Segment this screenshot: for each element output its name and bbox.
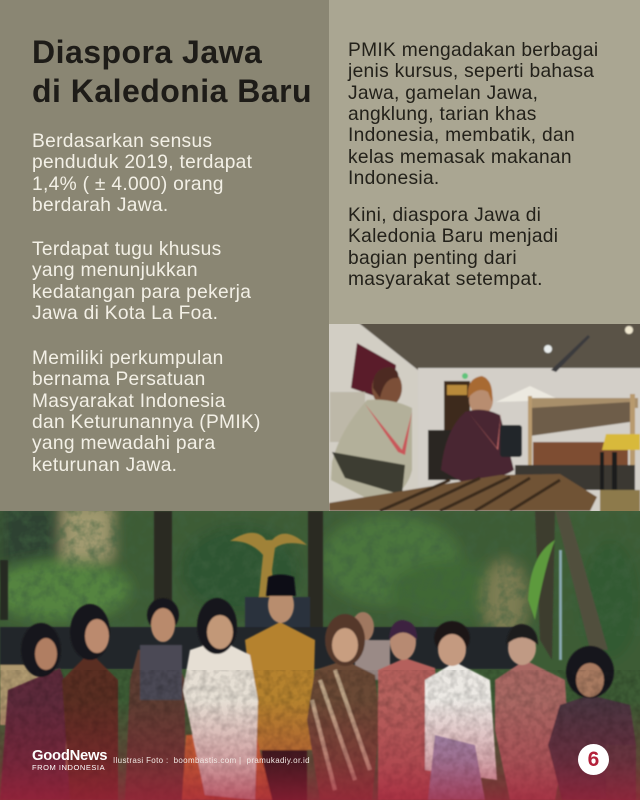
person 3 xyxy=(125,598,185,800)
text block: courses: kelas memasak makanan xyxy=(348,147,572,168)
text block: courses: angklung, tarian khas xyxy=(348,104,537,125)
text block: monument: yang menunjukkan xyxy=(32,260,198,281)
text block: today: Kaledonia Baru menjadi xyxy=(348,226,558,247)
text block: courses: Jawa, gamelan Jawa, xyxy=(348,83,538,104)
text block: today: masyarakat setempat. xyxy=(348,269,543,290)
panel: left text xyxy=(0,0,329,511)
text block: courses: PMIK mengadakan berbagai xyxy=(348,40,598,61)
text block: census: penduduk 2019, terdapat xyxy=(32,152,252,173)
background: foliage xyxy=(0,500,640,800)
title: di Kaledonia Baru xyxy=(32,73,312,109)
text block: PMIK association xyxy=(32,348,261,476)
text block: courses xyxy=(348,40,598,189)
text block: courses: Indonesia, membatik, dan xyxy=(348,125,575,146)
text block: courses: Indonesia. xyxy=(348,168,440,189)
text block: PMIK association: bernama Persatuan xyxy=(32,369,206,390)
text block: census: 1,4% ( ± 4.000) orang xyxy=(32,174,224,195)
text block: PMIK association: Memiliki perkumpulan xyxy=(32,348,224,369)
person 8 xyxy=(378,620,440,800)
text block: monument: Jawa di Kota La Foa. xyxy=(32,303,218,324)
person 5 man xyxy=(245,574,315,800)
logo tagline: FROM INDONESIA xyxy=(32,763,105,772)
text block: census: Berdasarkan sensus xyxy=(32,131,212,152)
panel: right text xyxy=(329,0,640,324)
foliage texture xyxy=(0,511,640,636)
text block: PMIK association: yang mewadahi para xyxy=(32,433,216,454)
logo wordmark: GoodNews xyxy=(32,748,107,764)
person 4 xyxy=(182,598,272,800)
text block: monument xyxy=(32,239,251,324)
text block: PMIK association: Masyarakat Indonesia xyxy=(32,391,226,412)
photo: group portrait xyxy=(0,511,640,800)
person 6 xyxy=(307,614,380,800)
text block: census: berdarah Jawa. xyxy=(32,195,168,216)
figure: woman with scarf xyxy=(441,376,522,482)
trees and statue xyxy=(0,511,608,725)
text block: courses: jenis kursus, seperti bahasa xyxy=(348,61,594,82)
logo: GoodNews from Indonesia xyxy=(32,748,107,772)
people xyxy=(0,574,636,800)
red footer gradient xyxy=(0,700,640,800)
text block: monument: Terdapat tugu khusus xyxy=(32,239,221,260)
photo credit: Ilustrasi Foto : boombastis.com | pramukadiy.or.id xyxy=(113,756,310,765)
person 11 girl xyxy=(548,646,636,800)
person 1 xyxy=(0,623,82,800)
text block: today xyxy=(348,205,558,290)
title: Diaspora Jawa xyxy=(32,34,262,70)
text block: PMIK association: keturunan Jawa. xyxy=(32,455,177,476)
text block: today: Kini, diaspora Jawa di xyxy=(348,205,541,226)
text block: PMIK association: dan Keturunannya (PMIK) xyxy=(32,412,261,433)
instrument: angklung foreground xyxy=(329,474,597,511)
title xyxy=(32,34,312,109)
person 7 back xyxy=(352,612,390,680)
figure: man with scarf xyxy=(331,367,412,500)
page number badge: 6 xyxy=(588,748,599,771)
person 9 xyxy=(425,621,497,800)
batik texture xyxy=(0,670,640,800)
photo: gamelan room xyxy=(329,324,640,511)
text block: census xyxy=(32,131,252,216)
text block: monument: kedatangan para pekerja xyxy=(32,282,251,303)
person 10 xyxy=(495,624,568,800)
page number badge xyxy=(578,744,609,775)
text block: today: bagian penting dari xyxy=(348,248,517,269)
person 2 xyxy=(62,604,118,800)
